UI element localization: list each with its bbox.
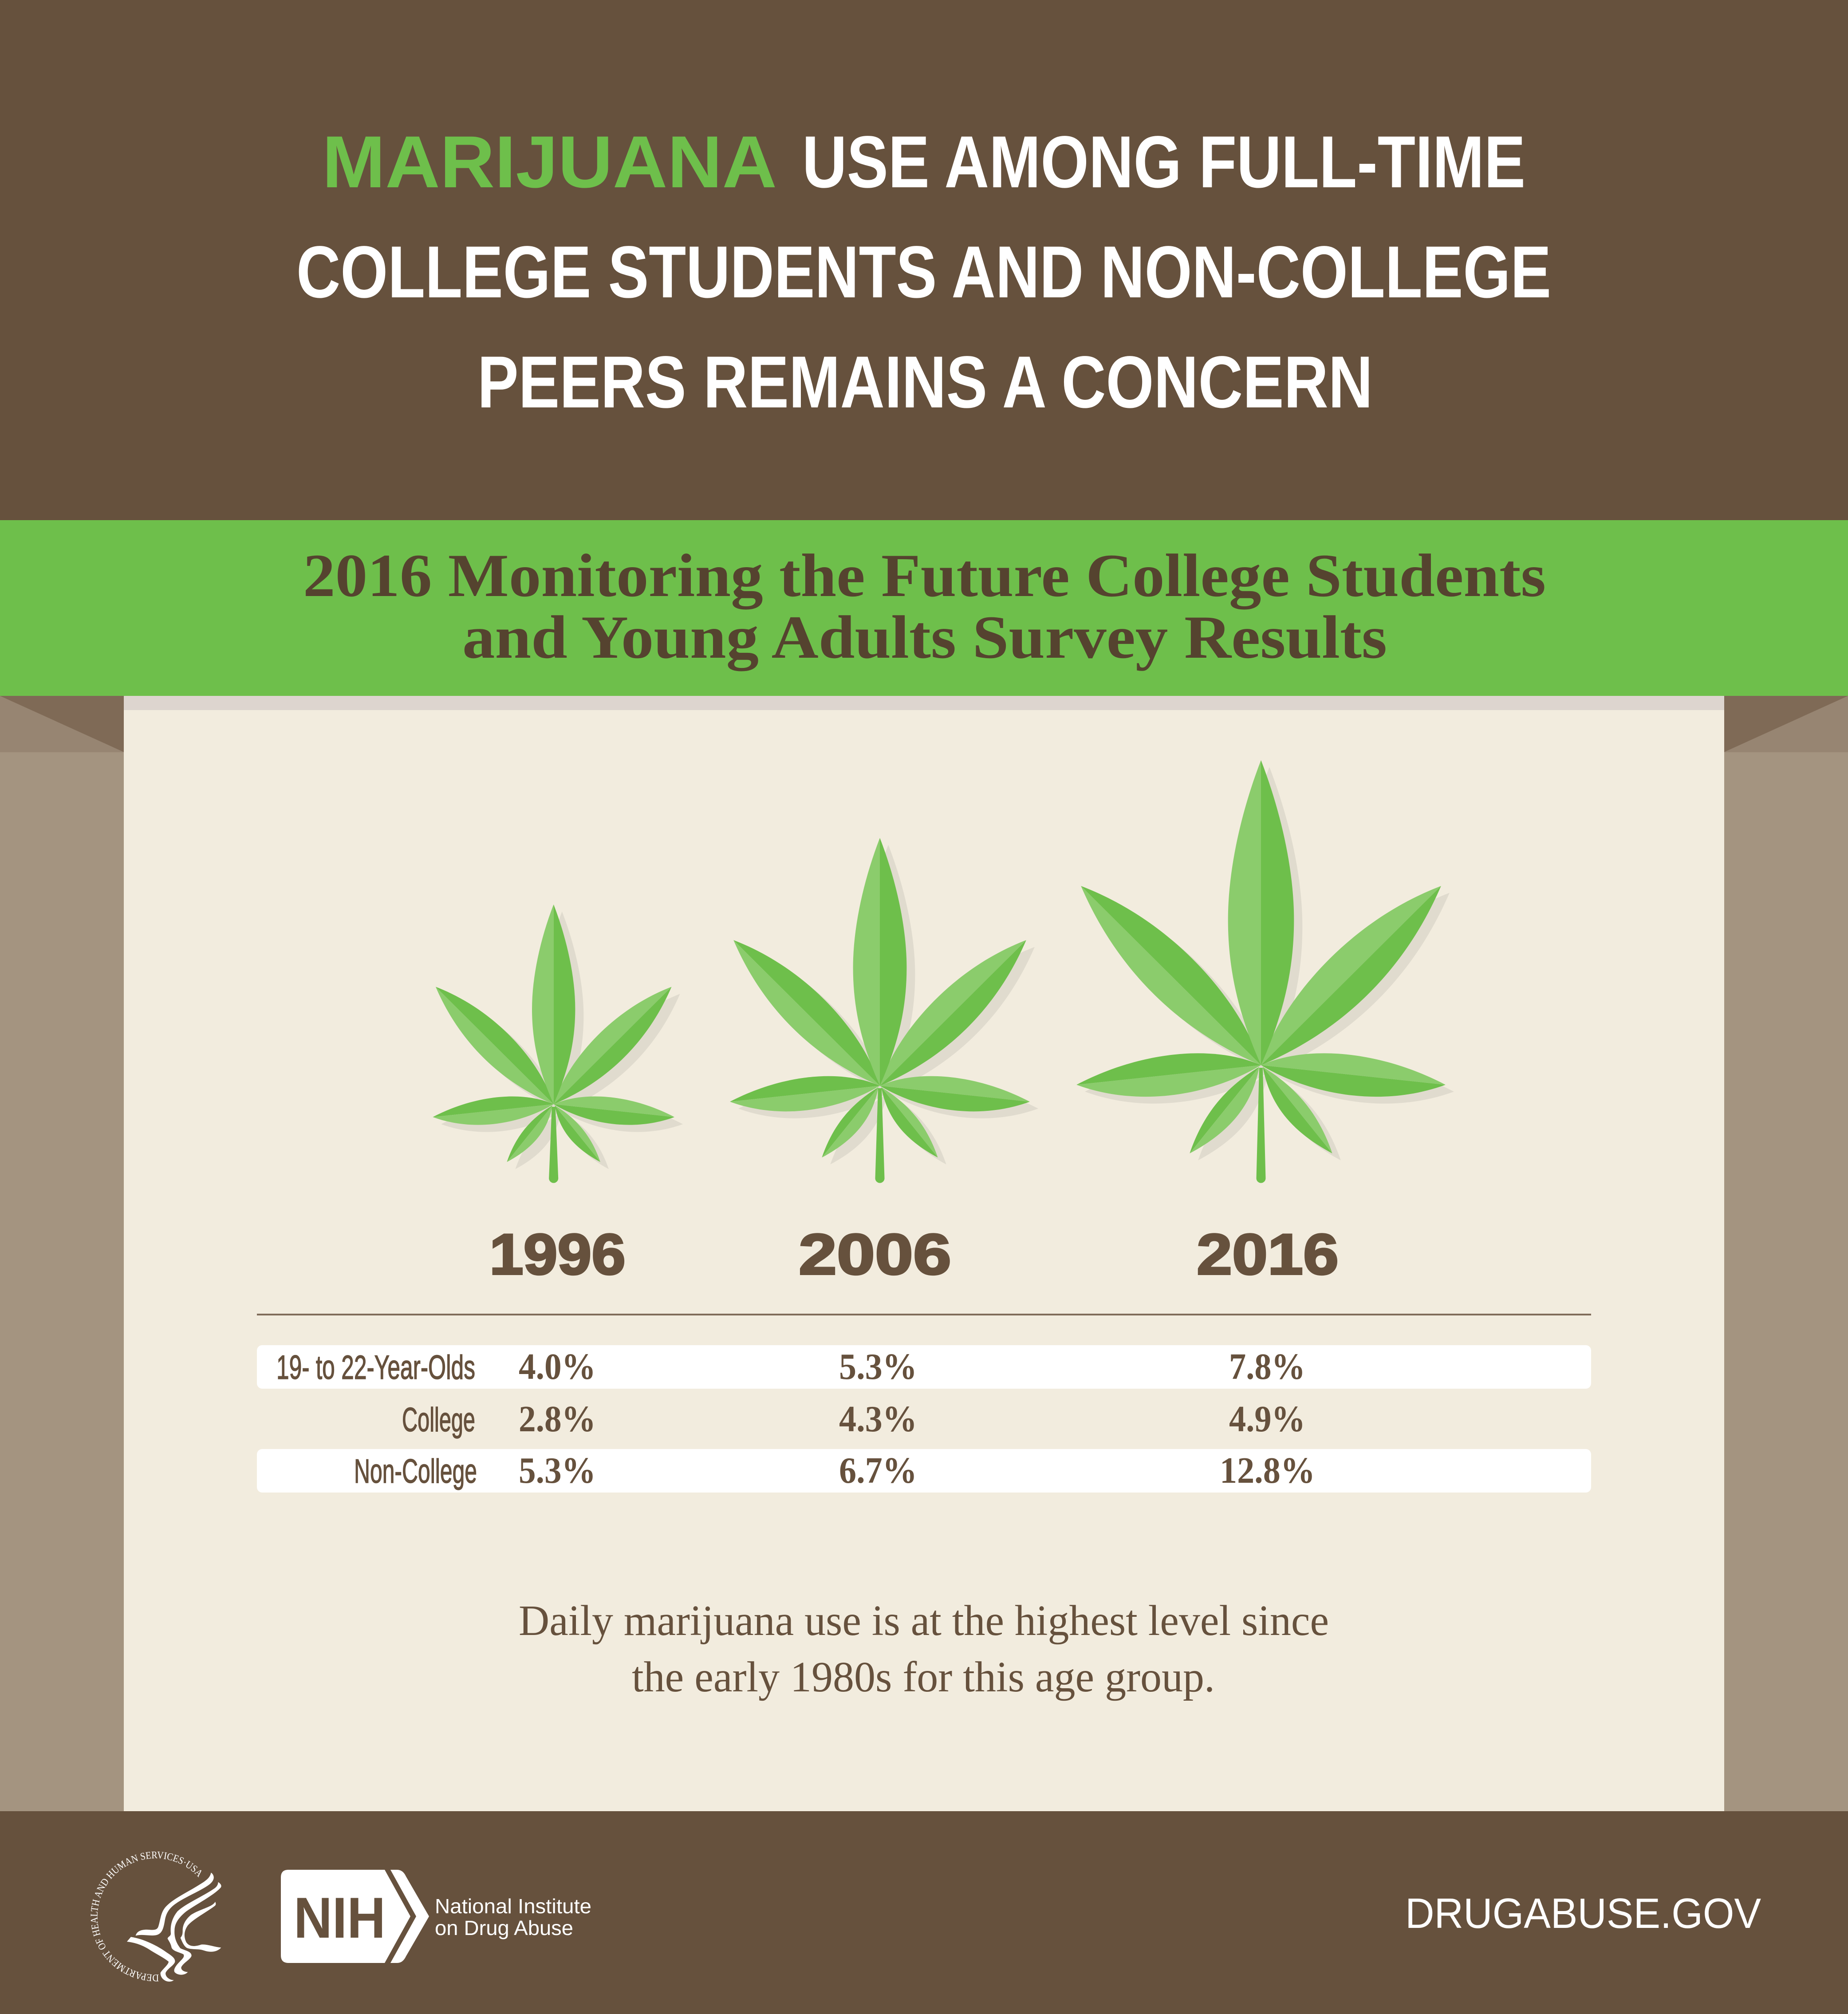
table row: College: 4.3% [839,1398,917,1440]
year labels: 1996 [489,1222,626,1287]
text block: daily use note [519,1597,1329,1701]
title [296,121,1551,423]
icon: cannabis leaf 2016 [1076,760,1454,1183]
panel: page background sides [0,696,1848,1811]
table row: 19- to 22-Year-Olds [257,1345,1591,1389]
panel: footer [0,1811,1848,2014]
table row: Non-College [257,1449,1591,1493]
text block: daily use note: Daily marijuana use is at the highest level since [519,1597,1329,1645]
icon: cannabis leaf 2006 [730,838,1038,1183]
table row: College: 2.8% [519,1398,596,1440]
table row: Non-College: 6.7% [839,1450,917,1491]
text block: National Institute on Drug Abuse [435,1895,591,1939]
subtitle: and Young Adults Survey Results [462,603,1387,671]
table row: Non-College: Non-College [354,1453,477,1490]
table row: 19- to 22-Year-Olds: 19- to 22-Year-Olds [276,1349,475,1386]
panel: main cream content [124,696,1724,1811]
table row: Non-College: 12.8% [1220,1450,1315,1491]
icon: NIH logo [281,1870,429,1963]
table row: Non-College: 5.3% [519,1450,596,1491]
year labels: 2006 [799,1222,951,1287]
table rule [257,1314,1591,1315]
icon: HHS seal: DEPARTMENT OF HEALTH AND HUMAN SERVICES·USA [88,1849,205,1983]
year labels: 2016 [1197,1222,1339,1287]
title: MARIJUANA [322,121,777,203]
text block: daily use note: the early 1980s for this age group. [632,1653,1215,1701]
title: PEERS REMAINS A CONCERN [477,341,1373,423]
title: USE AMONG FULL-TIME [802,121,1525,203]
table row: 19- to 22-Year-Olds: 5.3% [839,1346,917,1387]
text block: National Institute on Drug Abuse: National Institute [435,1895,591,1918]
subtitle: 2016 Monitoring the Future College Students [303,541,1546,609]
title: COLLEGE STUDENTS AND NON-COLLEGE [296,231,1551,313]
icon: NIH logo: NIH [294,1885,386,1950]
table row: College [402,1398,1305,1440]
text: website: DRUGABUSE.GOV [1405,1890,1761,1937]
table row: 19- to 22-Year-Olds: 4.0% [519,1346,596,1387]
panel: header [0,0,1848,520]
icon: cannabis leaf 1996 [433,904,683,1183]
text block: National Institute on Drug Abuse: on Drug Abuse [435,1916,573,1939]
panel: green subtitle band [0,520,1848,696]
table row: College: College [402,1401,475,1439]
table row: 19- to 22-Year-Olds: 7.8% [1229,1346,1305,1387]
subtitle [303,541,1546,671]
year labels [489,1222,1339,1287]
table row: College: 4.9% [1229,1398,1305,1440]
